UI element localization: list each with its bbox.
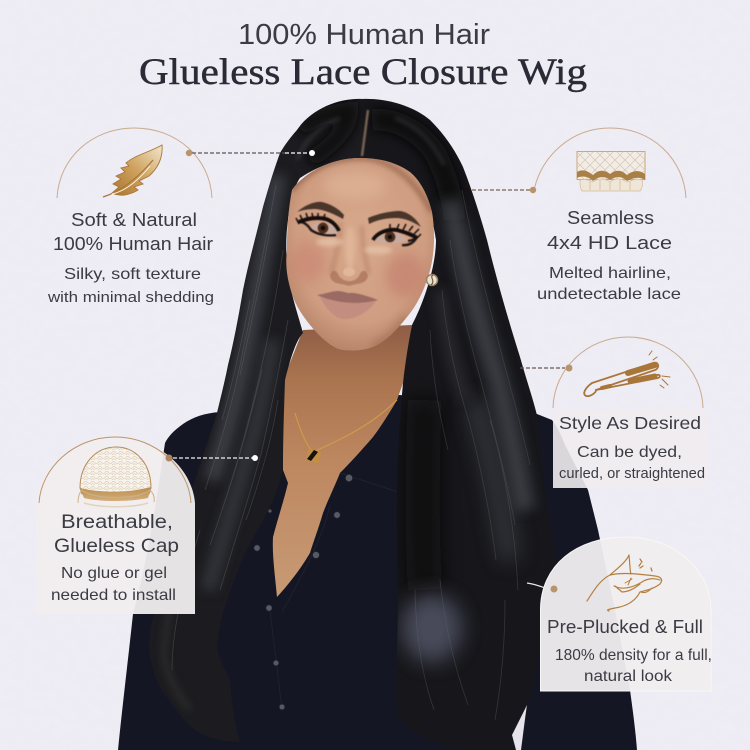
background sliver in hair [512, 705, 527, 750]
icon: flat iron [584, 351, 670, 396]
heading: Seamless [567, 208, 654, 228]
callout arch [553, 337, 703, 408]
text backing panel [553, 410, 708, 488]
earring [426, 274, 438, 286]
leader line [186, 150, 315, 156]
callout: style as desired [520, 337, 708, 488]
neck and chest [273, 325, 412, 597]
description: undetectable lace [537, 286, 681, 303]
description: Melted hairline, [549, 265, 671, 282]
description: needed to install [51, 587, 176, 604]
heading [53, 210, 213, 254]
description: 180% density for a full, [555, 647, 712, 664]
description [559, 444, 705, 482]
forehead glow [327, 172, 382, 196]
heading [547, 208, 672, 253]
callout arch [57, 128, 212, 198]
hair: left lobe [149, 99, 362, 742]
heading: Breathable, [61, 512, 173, 533]
leader line [166, 454, 258, 462]
icon: feather [103, 145, 162, 197]
heading: Glueless Cap [54, 536, 179, 557]
heading: 4x4 HD Lace [547, 233, 672, 253]
description [47, 266, 214, 306]
necklace and pendant [295, 400, 397, 463]
nose [330, 268, 368, 286]
leader line [472, 187, 536, 193]
description: No glue or gel [61, 565, 167, 582]
heading: Pre-Plucked & Full [547, 617, 703, 637]
description: with minimal shedding [47, 289, 214, 306]
description: natural look [584, 668, 673, 685]
shirt buttons [254, 474, 353, 710]
heading [54, 512, 179, 557]
arch panel [540, 537, 711, 691]
callout: pre-plucked and full [527, 537, 712, 691]
callout: breathable cap [36, 437, 258, 614]
face [286, 158, 438, 351]
description: Silky, soft texture [64, 266, 201, 283]
description: curled, or straightened [559, 465, 705, 482]
jaw and temple shadow [292, 158, 432, 212]
left eyebrow [297, 202, 344, 219]
hair: right lobe [362, 99, 557, 750]
description: Can be dyed, [577, 444, 682, 461]
title line 1: 100% Human Hair [238, 19, 490, 51]
nose shading [331, 222, 369, 274]
title [139, 19, 587, 93]
heading: Soft & Natural [71, 210, 197, 230]
leader line [527, 583, 558, 592]
black shirt [118, 395, 637, 750]
description [555, 647, 712, 685]
left eye [296, 213, 339, 235]
hair: right sheen bands [372, 120, 530, 720]
callout arch [39, 437, 191, 503]
icon: hand [587, 555, 662, 611]
shirt collar edge [270, 473, 398, 710]
right eyebrow [368, 211, 421, 227]
cheek blush [290, 242, 326, 282]
callout: seamless lace [472, 128, 686, 303]
callout arch [534, 128, 686, 198]
icon: cap [78, 447, 154, 507]
callout: soft and natural [47, 128, 315, 306]
title line 2: Glueless Lace Closure Wig [139, 52, 587, 93]
heading: Style As Desired [559, 413, 701, 433]
portrait of model [118, 99, 637, 750]
hair part line [362, 110, 368, 156]
under-eye highlights [316, 238, 344, 246]
lips [317, 291, 378, 319]
heading: 100% Human Hair [53, 234, 213, 254]
leader line [520, 364, 572, 372]
right eye [373, 224, 421, 245]
crown highlights [297, 118, 444, 165]
hair: left sheen bands [164, 110, 350, 710]
description [51, 565, 176, 604]
arch panel [36, 437, 195, 614]
description [537, 265, 681, 303]
icon: lace [577, 152, 645, 191]
